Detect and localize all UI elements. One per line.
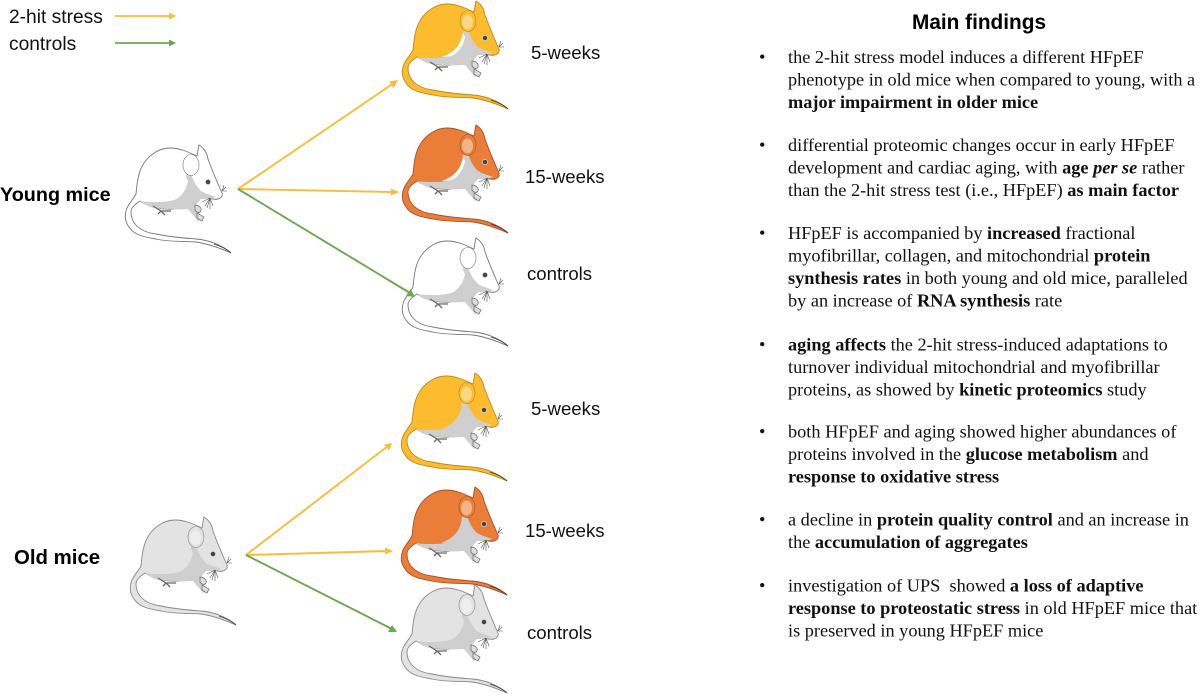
legend arrow: controls <box>115 40 176 46</box>
icon: old control mouse <box>401 585 507 693</box>
label: young 15-weeks: 15-weeks <box>525 166 605 187</box>
finding 2: than the 2-hit stress test (i.e., HFpEF) as main factor <box>788 180 1179 201</box>
finding 3: • <box>759 223 765 243</box>
finding 6: the accumulation of aggregates <box>788 532 1028 552</box>
finding 1 <box>759 47 1195 112</box>
finding 7: • <box>759 576 765 596</box>
finding 6: a decline in protein quality control and an increase in <box>788 510 1189 530</box>
icon: young 15-weeks mouse <box>402 125 508 233</box>
finding 6: • <box>759 510 765 530</box>
finding 4 <box>759 334 1168 400</box>
finding 3: HFpEF is accompanied by increased fractional <box>788 223 1135 243</box>
label: young controls: controls <box>527 263 592 284</box>
finding 3: myofibrillar, collagen, and mitochondrial protein <box>788 246 1150 266</box>
finding 7: is preserved in young HFpEF mice <box>788 620 1043 640</box>
finding 6 <box>759 510 1189 552</box>
label: young 5-weeks: 5-weeks <box>531 42 600 63</box>
finding 4: proteins, as showed by kinetic proteomics study <box>788 380 1148 400</box>
arrow: old to 5-weeks <box>246 443 392 555</box>
icon: old 5-weeks mouse <box>401 373 507 481</box>
finding 1: ‌major impairment in older mice <box>788 92 1038 112</box>
icon: young 5-weeks mouse <box>402 1 508 109</box>
finding 5: response to oxidative stress <box>788 466 999 486</box>
finding 7: investigation of UPS showed a loss of adaptive <box>788 576 1144 596</box>
finding 2: • <box>759 135 765 155</box>
arrow: old to 15-weeks <box>246 548 393 555</box>
legend label: controls: controls <box>9 34 76 55</box>
finding 3: synthesis rates in both young and old mice, paralleled <box>788 268 1188 288</box>
arrow: young to controls <box>238 189 415 297</box>
finding 1: • <box>759 47 765 67</box>
finding 5 <box>759 422 1177 486</box>
group label: old mice: Old mice <box>14 547 100 569</box>
icon: old mouse <box>130 517 236 625</box>
icon: young control mouse <box>402 238 508 346</box>
label: old 5-weeks: 5-weeks <box>531 398 600 419</box>
finding 7: response to proteostatic stress in old HFpEF mice that <box>788 598 1197 618</box>
finding 2: development and cardiac aging, with age per se rather <box>788 158 1184 178</box>
finding 2: differential proteomic changes occur in early HFpEF <box>788 135 1174 155</box>
finding 3 <box>759 223 1188 310</box>
finding 4: • <box>759 334 765 354</box>
finding 4: turnover individual mitochondrial and myofibrillar <box>788 357 1160 377</box>
finding 7 <box>759 576 1197 640</box>
label: old controls: controls <box>527 622 592 643</box>
heading: main findings: Main findings <box>912 11 1046 34</box>
legend <box>9 7 176 55</box>
finding 1: the 2-hit stress model induces a different HFpEF <box>788 47 1144 67</box>
icon: young mouse <box>125 145 231 253</box>
arrow: young to 15-weeks <box>238 188 399 196</box>
finding 5: proteins involved in the glucose metabolism and <box>788 444 1149 464</box>
legend arrow: 2-hit stress <box>115 12 176 20</box>
label: old 15-weeks: 15-weeks <box>525 520 605 541</box>
legend label: 2-hit stress: 2-hit stress <box>9 7 103 28</box>
icon: old 15-weeks mouse <box>401 487 507 595</box>
arrow: young to 5-weeks <box>238 80 398 189</box>
finding 4: aging affects the 2-hit stress-induced adaptations to <box>788 334 1168 354</box>
finding 1: phenotype in old mice when compared to young, with a <box>788 70 1195 90</box>
arrow: old to controls <box>246 555 397 632</box>
finding 3: by an increase of RNA synthesis rate <box>788 290 1062 310</box>
finding 5: • <box>759 422 765 442</box>
finding 2 <box>759 135 1184 201</box>
group label: young mice: Young mice <box>0 184 111 206</box>
finding 5: both HFpEF and aging showed higher abundances of <box>788 422 1177 442</box>
